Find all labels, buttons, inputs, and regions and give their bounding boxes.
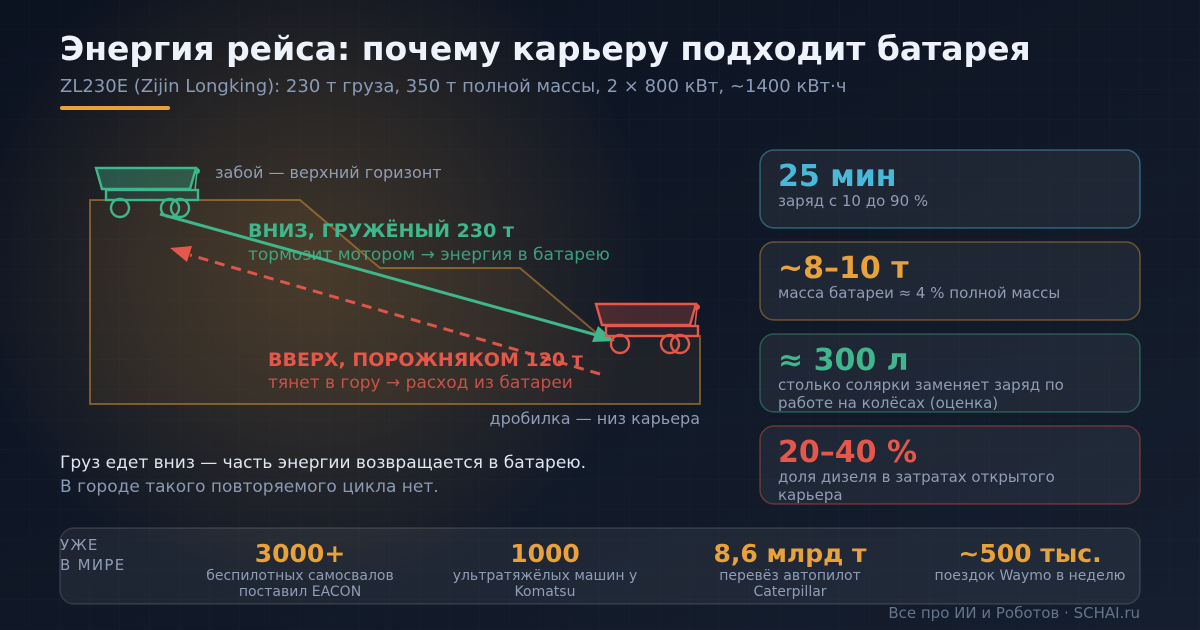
card: charge time: 25 мин (778, 159, 896, 194)
diagram: quarry trip (90, 163, 700, 428)
card: charge time (760, 150, 1140, 228)
stat: EACON: беспилотных самосвалов (206, 568, 394, 584)
stat: Komatsu (453, 539, 637, 600)
stat: Caterpillar: 8,6 млрд т (713, 539, 867, 568)
stat: Komatsu: ультратяжёлых машин у (453, 568, 637, 584)
title accent bar (60, 106, 170, 110)
arrow: empty uphill (170, 246, 600, 374)
label: downhill effect: тормозит мотором → энергия в батарею (248, 245, 610, 265)
card: diesel replaced: столько солярки заменяет заряд по (778, 376, 1064, 394)
truck: empty at bottom (596, 304, 700, 353)
card: diesel replaced (760, 334, 1140, 412)
stat: Caterpillar (713, 539, 867, 600)
stat: EACON (206, 539, 394, 600)
label: loaded downhill: ВНИЗ, ГРУЖЁНЫЙ 230 т (248, 218, 514, 242)
stat: Waymo: поездок Waymo в неделю (935, 568, 1126, 584)
footer credit: Все про ИИ и Роботов · SCHAI.ru (888, 604, 1140, 622)
caption (60, 453, 586, 497)
strip label: В МИРЕ (60, 556, 126, 574)
card: diesel share: карьера (778, 486, 843, 504)
card: diesel replaced: ≈ 300 л (778, 343, 909, 378)
stat: Komatsu: Komatsu (515, 584, 575, 600)
card: diesel share (760, 426, 1140, 504)
subtitle: ZL230E (Zijin Longking): 230 т груза, 350 т полной массы, 2 × 800 кВт, ~1400 кВт·ч (60, 76, 846, 97)
label: empty uphill: ВВЕРХ, ПОРОЖНЯКОМ 120 т (268, 349, 583, 371)
stat: Caterpillar: перевёз автопилот (719, 568, 861, 584)
quarry profile (90, 200, 700, 404)
title: Энергия рейса: почему карьеру подходит батарея (60, 29, 1031, 68)
strip label: УЖЕ (60, 536, 99, 554)
arrow: loaded downhill (160, 214, 615, 342)
card: diesel replaced: работе на колёсах (оценка) (778, 394, 998, 412)
stat: Komatsu: 1000 (510, 539, 580, 568)
card: battery mass (760, 242, 1140, 320)
truck: loaded at top (96, 168, 200, 217)
card: battery mass: масса батареи ≈ 4 % полной массы (778, 284, 1060, 302)
stat: Caterpillar: Caterpillar (753, 584, 827, 600)
card: battery mass: ~8–10 т (778, 251, 909, 286)
label: upper bench: забой — верхний горизонт (215, 163, 442, 182)
card: diesel share: доля дизеля в затратах открытого (778, 468, 1055, 486)
caption: Груз едет вниз — часть энергии возвращается в батарею. (60, 453, 586, 473)
card: charge time: заряд с 10 до 90 % (778, 192, 928, 210)
card: diesel share: 20–40 % (778, 435, 917, 470)
stat: Waymo: ~500 тыс. (958, 539, 1102, 568)
label: uphill effect: тянет в гору → расход из батареи (268, 373, 573, 393)
stat: EACON: 3000+ (255, 539, 345, 568)
caption: В городе такого повторяемого цикла нет. (60, 477, 439, 497)
bottom strip: already in the world (60, 528, 1140, 604)
stat: Waymo (935, 539, 1126, 584)
label: crusher: дробилка — низ карьера (490, 409, 700, 428)
stat: EACON: поставил EACON (239, 584, 361, 600)
